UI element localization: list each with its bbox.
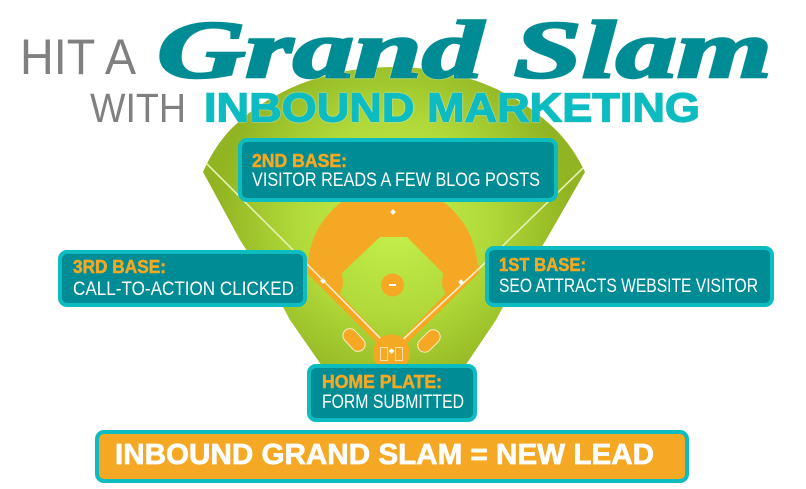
- bases: [320, 209, 464, 285]
- callout: 1st base: 1ST BASE:: [499, 255, 586, 275]
- base paths: [308, 265, 478, 352]
- title line 2: INBOUND MARKETING: [204, 84, 700, 130]
- infield dirt: [308, 202, 478, 344]
- callout: 3rd base: CALL-TO-ACTION CLICKED: [73, 278, 294, 300]
- title: [20, 4, 772, 131]
- baseball field: [203, 67, 585, 372]
- callout: 2nd base: VISITOR READS A FEW BLOG POSTS: [252, 169, 540, 191]
- base cutouts: [307, 270, 480, 299]
- callout: 3rd base: [60, 252, 305, 305]
- home plate circle: [373, 334, 410, 372]
- banner: new lead: [97, 432, 687, 481]
- callout: home plate: [309, 366, 475, 420]
- title line 1: HIT A: [20, 29, 137, 85]
- callout: 1st base: [487, 248, 772, 305]
- on-deck circles: [340, 326, 443, 355]
- callout: home plate: HOME PLATE:: [322, 372, 442, 392]
- callout: 3rd base: 3RD BASE:: [73, 257, 166, 277]
- callout: home plate: FORM SUBMITTED: [322, 391, 464, 413]
- title line 1: [20, 4, 772, 95]
- title line 2: WITH: [90, 85, 186, 131]
- foul lines: [206, 163, 583, 262]
- callout: 2nd base: 2ND BASE:: [252, 151, 347, 171]
- callout: 2nd base: [240, 140, 556, 200]
- pitcher's mound: [381, 274, 404, 296]
- banner: new lead: INBOUND GRAND SLAM = NEW LEAD: [115, 439, 654, 471]
- title line 1: Grand Slam: [157, 4, 772, 95]
- outfield grass: [203, 67, 585, 366]
- infield grass: [340, 237, 446, 350]
